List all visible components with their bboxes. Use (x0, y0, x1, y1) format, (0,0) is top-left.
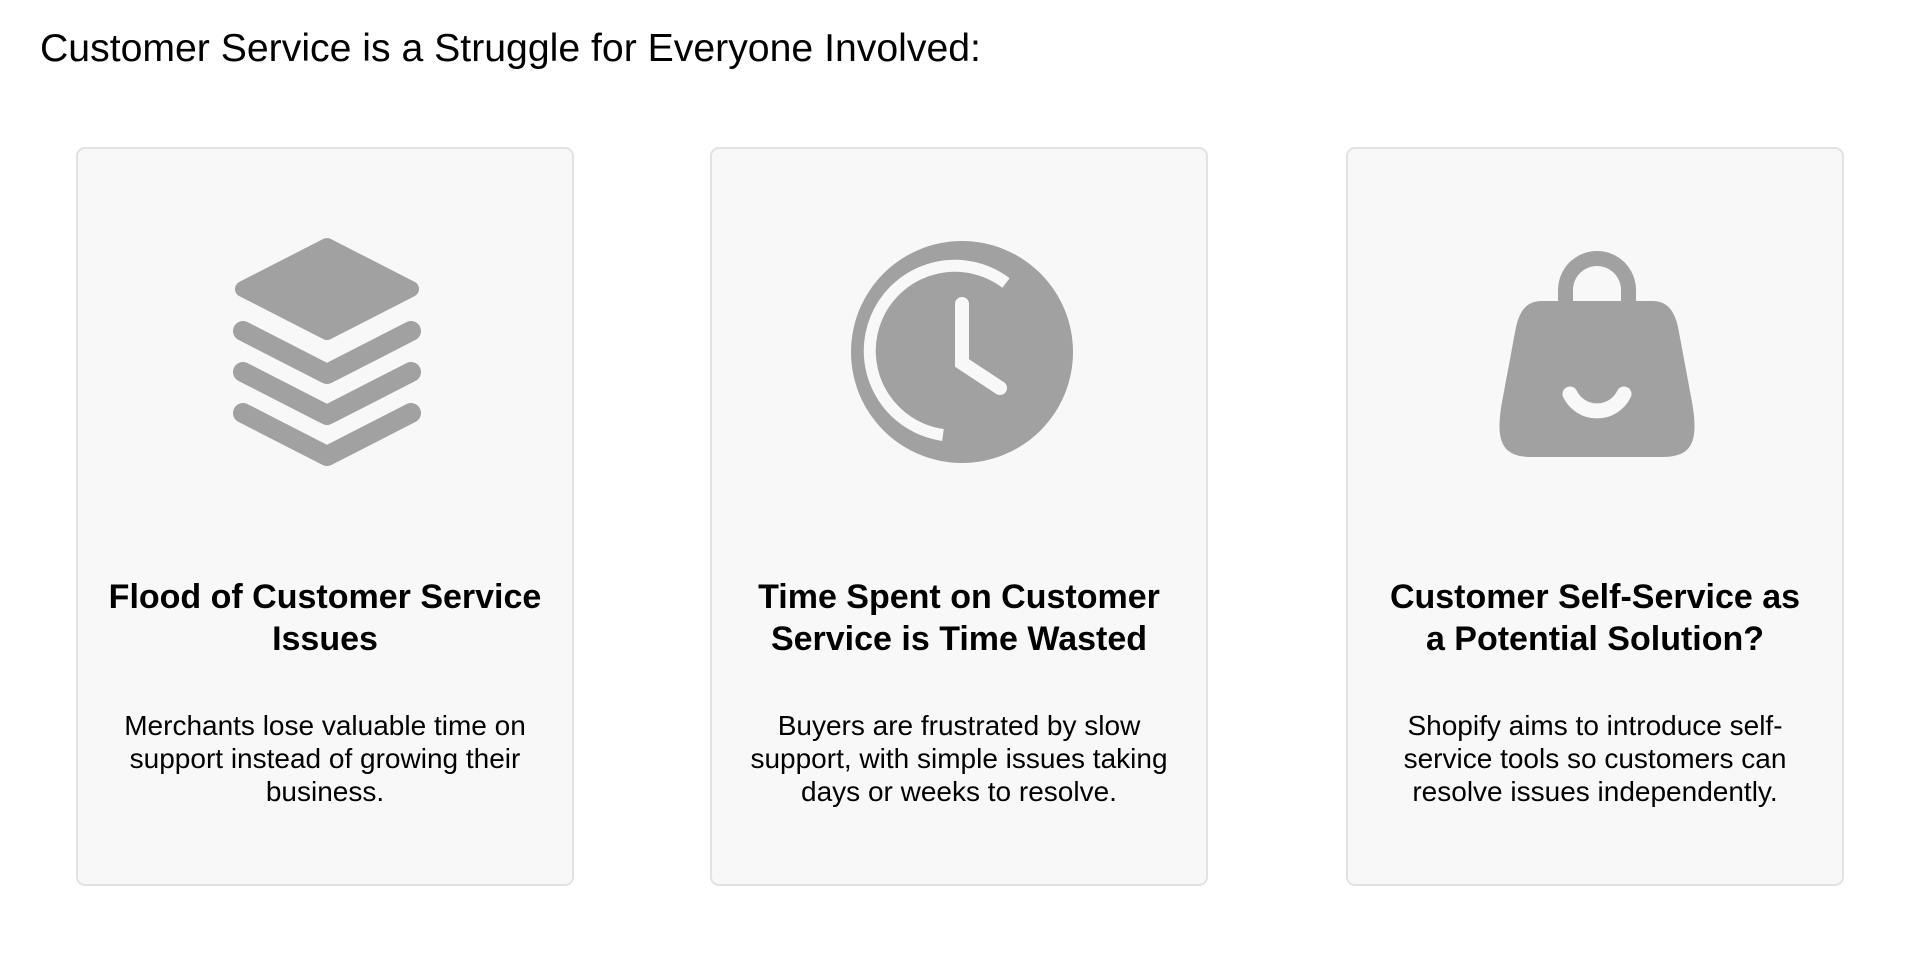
heading: Flood of Customer Service (109, 578, 541, 616)
heading: Service is Time Wasted (771, 620, 1147, 658)
title: Customer Service is a Struggle for Everyone Involved: (40, 27, 981, 70)
heading: Customer Self-Service as (1390, 578, 1800, 616)
icon: clock (851, 241, 1073, 463)
panel: flood of issues (76, 147, 574, 886)
heading (758, 578, 1160, 658)
heading: Time Spent on Customer (758, 578, 1160, 616)
heading: a Potential Solution? (1426, 620, 1764, 658)
heading (1390, 578, 1800, 658)
body text: Shopify aims to introduce self-service tools so customers can resolve issues independently. (1404, 710, 1786, 807)
heading (109, 578, 541, 658)
body text: Buyers are frustrated by slow support, with simple issues taking days or weeks to resolve. (750, 710, 1168, 807)
body text: Merchants lose valuable time on support instead of growing their business. (124, 710, 526, 807)
icon: stack of layers (233, 238, 421, 466)
panel: time wasted (710, 147, 1208, 886)
panel: self-service (1346, 147, 1844, 886)
heading: Issues (272, 620, 378, 658)
icon: shopping bag (1500, 251, 1694, 457)
